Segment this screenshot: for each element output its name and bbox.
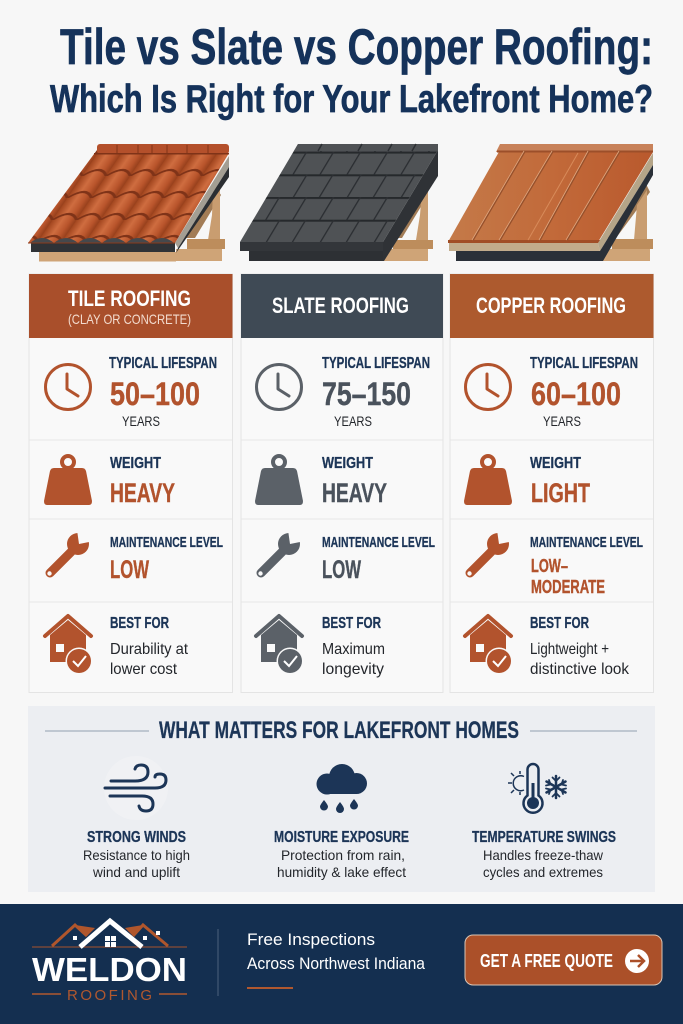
- icon: weight: [255, 454, 303, 505]
- lifespan: TYPICAL LIFESPAN: [109, 355, 217, 372]
- maintenance: [110, 534, 223, 584]
- logo: Weldon Roofing: [32, 921, 187, 1004]
- title: [50, 19, 653, 121]
- maintenance: LOW–: [531, 556, 568, 576]
- footer banner: [0, 904, 683, 1024]
- icon: weight: [464, 454, 512, 505]
- header: [450, 274, 654, 338]
- card background: [450, 274, 654, 692]
- best for: BEST FOR: [530, 615, 589, 632]
- lifespan: [322, 355, 430, 429]
- factor: temperature swings: TEMPERATURE SWINGS: [472, 829, 616, 846]
- lifespan: YEARS: [334, 413, 372, 429]
- header: COPPER ROOFING: [476, 293, 626, 318]
- weight: WEIGHT: [322, 455, 373, 472]
- button: get a free quote: [465, 935, 662, 985]
- lifespan: 60–100: [531, 376, 621, 412]
- icon: clock: [256, 364, 302, 410]
- maintenance: [322, 534, 435, 584]
- maintenance: [530, 534, 643, 597]
- best for: Durability at: [110, 641, 189, 658]
- factor: strong winds: [83, 829, 190, 880]
- weight: WEIGHT: [530, 455, 581, 472]
- lifespan: TYPICAL LIFESPAN: [530, 355, 638, 372]
- maintenance: MODERATE: [531, 577, 605, 597]
- best for: distinctive look: [530, 661, 630, 678]
- card background: [241, 274, 443, 692]
- lifespan: YEARS: [122, 413, 160, 429]
- lifespan: TYPICAL LIFESPAN: [322, 355, 430, 372]
- icon: clock: [466, 364, 510, 410]
- weight: [322, 455, 387, 508]
- factor: moisture exposure: Protection from rain,: [281, 847, 405, 863]
- best for: [530, 615, 630, 678]
- header: [29, 274, 232, 338]
- tagline: [247, 930, 425, 989]
- maintenance: MAINTENANCE LEVEL: [322, 534, 435, 551]
- icon: wrench: [258, 530, 305, 576]
- logo: Weldon Roofing: ROOFING: [67, 987, 152, 1004]
- factor: temperature swings: [472, 829, 616, 880]
- weight: [530, 455, 590, 508]
- best for: Lightweight +: [530, 641, 609, 658]
- maintenance: LOW: [110, 556, 149, 584]
- panel background: [28, 706, 655, 892]
- lifespan: 75–150: [322, 376, 411, 412]
- weight: [110, 455, 175, 508]
- button: get a free quote: GET A FREE QUOTE: [480, 951, 613, 971]
- lifespan: YEARS: [543, 413, 581, 429]
- panel: what matters for lakefront homes: [28, 706, 655, 892]
- factor: moisture exposure: [274, 829, 409, 880]
- header: SLATE ROOFING: [272, 293, 409, 318]
- weight: LIGHT: [531, 478, 590, 508]
- factor: temperature swings: cycles and extremes: [483, 864, 603, 880]
- factor: strong winds: Resistance to high: [83, 847, 190, 863]
- factor: temperature swings: Handles freeze-thaw: [483, 847, 604, 863]
- icon: wind: [104, 756, 168, 820]
- icon: clock: [46, 364, 90, 410]
- best for: Maximum: [322, 641, 385, 658]
- weight: WEIGHT: [110, 455, 161, 472]
- illustration: tile roof: [28, 144, 229, 262]
- icon: rain cloud: [316, 764, 367, 813]
- header: TILE ROOFING: [68, 286, 191, 311]
- header: [241, 274, 443, 338]
- weight: HEAVY: [110, 478, 175, 508]
- lifespan: [530, 355, 638, 429]
- best for: longevity: [322, 661, 384, 678]
- icon: weight: [44, 454, 92, 505]
- lifespan: 50–100: [110, 376, 200, 412]
- panel: slate roofing: [241, 274, 443, 692]
- best for: lower cost: [110, 661, 178, 678]
- best for: BEST FOR: [110, 615, 169, 632]
- best for: BEST FOR: [322, 615, 381, 632]
- heading: WHAT MATTERS FOR LAKEFRONT HOMES: [159, 717, 519, 744]
- panel: copper roofing: [450, 274, 654, 692]
- factor: moisture exposure: humidity & lake effect: [277, 864, 406, 880]
- icon: wrench: [47, 530, 94, 576]
- footer background: [0, 904, 683, 1024]
- icon: house check: [256, 616, 304, 674]
- icon: thermometer with sun and snowflake: [508, 764, 566, 813]
- factor: strong winds: wind and uplift: [92, 864, 180, 880]
- icon: house check: [45, 616, 92, 674]
- factor: strong winds: STRONG WINDS: [87, 829, 186, 846]
- best for: [110, 615, 189, 678]
- weight: HEAVY: [322, 478, 387, 508]
- panel: tile roofing: [29, 274, 232, 692]
- illustration: copper roof: [448, 144, 653, 261]
- tagline: Free Inspections: [247, 930, 375, 949]
- header: (CLAY OR CONCRETE): [68, 311, 191, 327]
- logo: Weldon Roofing: WELDON: [32, 951, 187, 988]
- maintenance: MAINTENANCE LEVEL: [110, 534, 223, 551]
- tagline: Across Northwest Indiana: [247, 954, 425, 973]
- maintenance: LOW: [322, 556, 361, 584]
- factor: moisture exposure: MOISTURE EXPOSURE: [274, 829, 409, 846]
- lifespan: [109, 355, 217, 429]
- card background: [29, 274, 232, 692]
- illustration: slate roof: [240, 144, 438, 261]
- best for: [322, 615, 385, 678]
- icon: wrench: [467, 530, 514, 576]
- icon: house check: [465, 616, 512, 674]
